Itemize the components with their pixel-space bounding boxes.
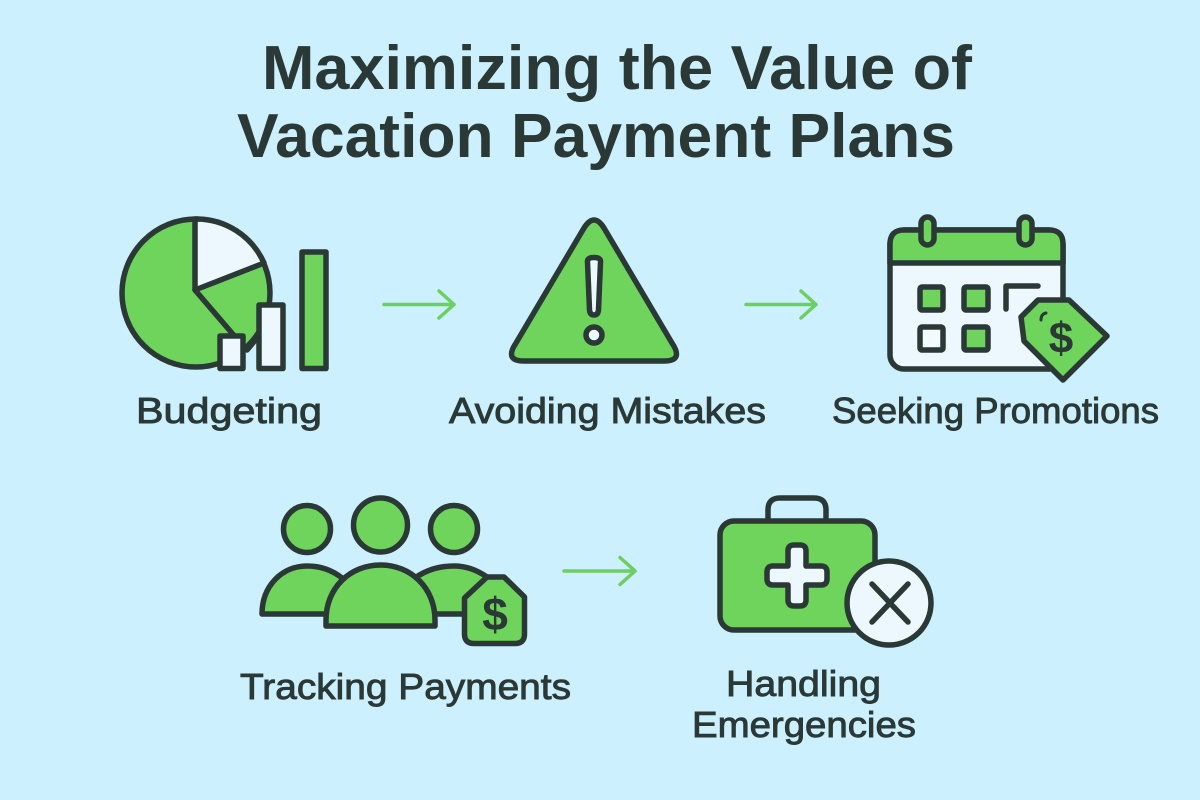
icon: budgeting pie chart and bars — [122, 219, 326, 369]
people tag dollar sign: $ — [482, 588, 508, 640]
price tag dollar sign: $ — [1049, 314, 1073, 363]
icon: people with price tag — [262, 498, 524, 644]
label: Avoiding Mistakes: Avoiding Mistakes — [449, 390, 766, 431]
title — [237, 34, 972, 171]
label: Tracking Payments: Tracking Payments — [240, 666, 571, 707]
icon: first aid kit with cross badge — [720, 498, 931, 645]
arrow: tracking payments to handling emergencies — [564, 558, 635, 584]
label: Handling Emergencies: Emergencies — [692, 704, 916, 745]
label: Handling Emergencies — [692, 663, 916, 745]
arrow: budgeting to avoiding mistakes — [384, 291, 454, 318]
icon: warning triangle — [512, 220, 676, 361]
icon: calendar with price tag — [890, 217, 1107, 380]
title: Vacation Payment Plans — [237, 102, 955, 171]
label: Seeking Promotions: Seeking Promotions — [832, 390, 1159, 431]
label: Budgeting: Budgeting — [136, 390, 322, 431]
arrow: avoiding mistakes to seeking promotions — [746, 291, 816, 318]
title: Maximizing the Value of — [262, 34, 972, 103]
label: Handling Emergencies: Handling — [726, 663, 881, 704]
